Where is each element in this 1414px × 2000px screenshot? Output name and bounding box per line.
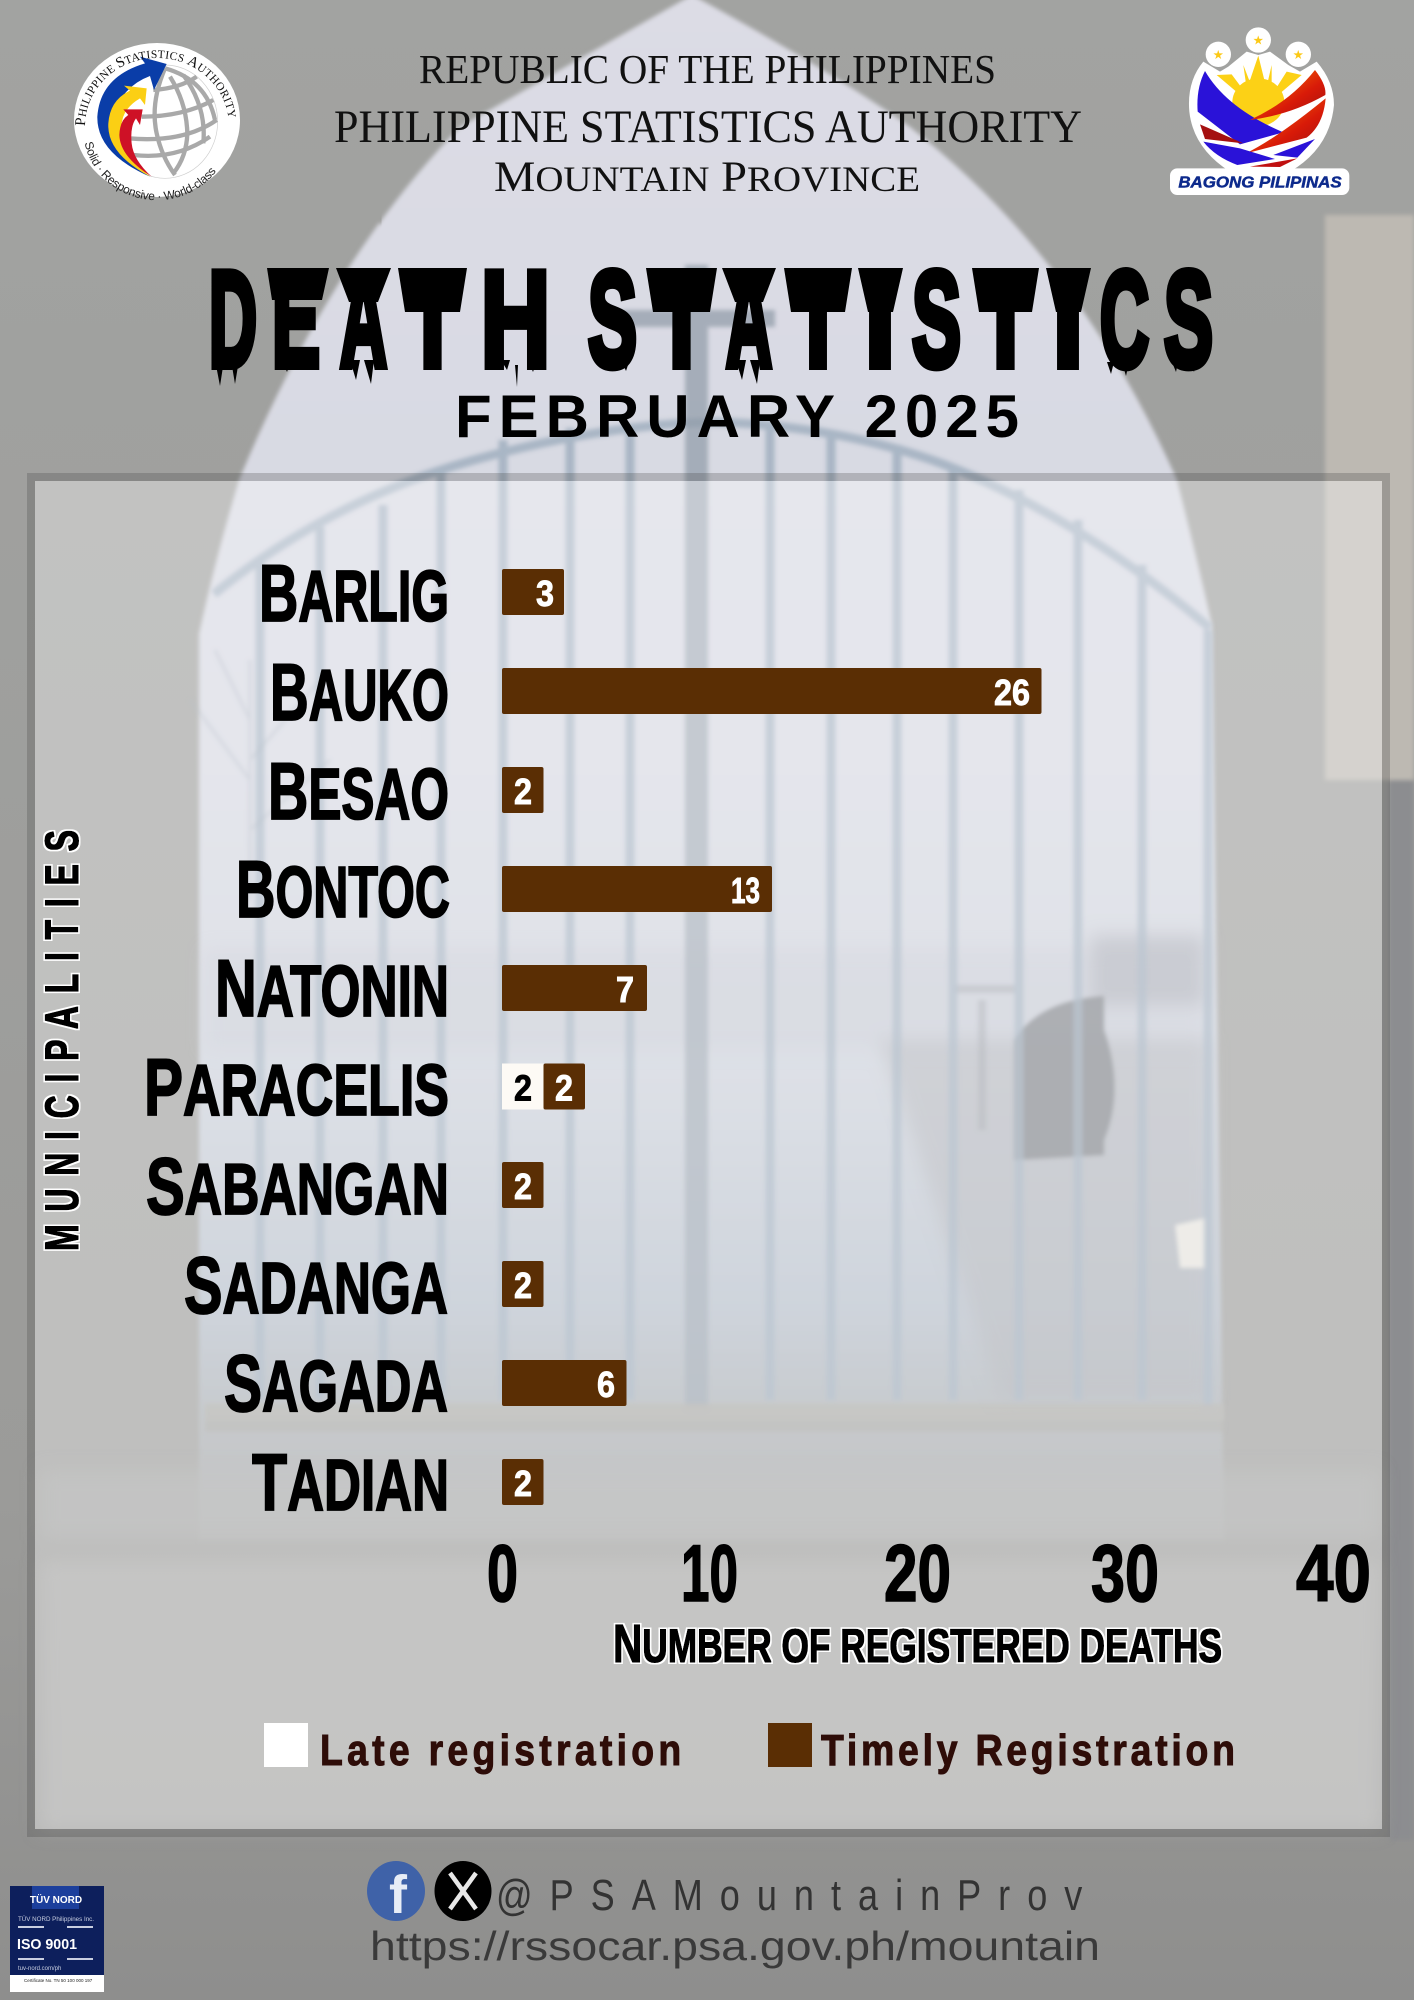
x-axis tick labels: 20 [884,1529,951,1619]
bar: Natonin 7: 7 [616,969,634,1010]
legend label: late: Late registration [320,1725,681,1775]
icon: X [434,1861,492,1921]
municipality labels: NATONIN [215,944,449,1034]
title: Death Statistics [209,243,1213,395]
municipality labels: SABANGAN [146,1142,449,1232]
municipality labels: BESAO [268,747,449,837]
bar: Barlig 3 [502,569,564,615]
title: Death Statistics: S [912,243,961,395]
logo: Bagong Pilipinas [1170,27,1349,195]
bar: Bauko 26 [502,668,1042,714]
title: Death Statistics: D [209,243,257,395]
title: Death Statistics: T [791,243,845,395]
bar: Sabangan 2 [502,1162,544,1208]
municipality labels: BAUKO [270,648,449,738]
bar: Sadanga 2: 2 [514,1265,532,1306]
legend swatch: timely [768,1723,812,1767]
badge: ISO 9001 certification: tuv-nord.com/ph [18,1966,61,1972]
icon: Facebook [367,1861,425,1925]
bar: Paracelis late 2 and timely 2: 2 [514,1068,532,1108]
municipality labels: SADANGA [184,1241,448,1331]
title: Death Statistics: C [1100,243,1149,395]
website URL: https://rssocar.psa.gov.ph/mountain [370,1923,1100,1969]
title: Death Statistics: S [1164,243,1213,395]
badge: ISO 9001 certification [10,1886,104,1992]
bar: Sabangan 2: 2 [514,1166,532,1207]
logo: Philippine Statistics Authority seal: PHILIPPINE STATISTICS AUTHORITY [75,50,236,126]
bar: Paracelis late 2 and timely 2: 2 [555,1068,573,1108]
bar: Sagada 6 [502,1360,626,1406]
tombstone [1014,996,1114,1160]
x-axis tick labels [487,1529,1371,1619]
agency heading [334,46,1082,201]
subtitle: February 2025: FEBRUARY 2025 [455,383,1019,450]
title: Death Statistics: E [272,243,320,395]
bar: Natonin 7 [502,965,647,1011]
agency heading: PHILIPPINE STATISTICS AUTHORITY [334,101,1082,153]
title: Death Statistics: T [654,243,709,395]
logo: Philippine Statistics Authority seal [74,43,240,200]
agency heading: MOUNTAIN PROVINCE [494,154,920,201]
y-axis title: Municipalities: MUNICIPALITIES [36,830,89,1251]
chart panel [31,477,1386,1833]
bar: Barlig 3: 3 [536,573,554,614]
municipality labels: TADIAN [252,1438,449,1528]
bar: Tadian 2: 2 [514,1463,532,1504]
legend swatch: late [264,1723,308,1767]
legend label: timely: Timely Registration [821,1725,1235,1775]
bar: Tadian 2 [502,1459,544,1505]
icon: Facebook: f [389,1865,408,1925]
social handle: @PSAMountainProv [496,1871,1082,1920]
title: Death Statistics: I [1053,243,1083,395]
bar: Bontoc 13 [502,866,772,912]
badge: ISO 9001 certification: ISO 9001 [17,1936,77,1953]
title: Death Statistics: H [481,243,550,395]
bar: Paracelis late 2 and timely 2 [502,1064,585,1110]
badge: ISO 9001 certification: TÜV NORD [30,1893,82,1906]
agency heading: REPUBLIC OF THE PHILIPPINES [419,46,996,92]
municipality labels: PARACELIS [144,1043,449,1133]
municipality labels: BARLIG [259,549,449,639]
logo: Bagong Pilipinas: ★ [1293,48,1304,62]
bar: Besao 2: 2 [514,771,532,812]
logo: Bagong Pilipinas: ★ [1213,48,1224,62]
x-axis tick labels: 0 [487,1529,518,1619]
x-axis tick labels: 40 [1296,1529,1371,1619]
legend [264,1723,1235,1775]
bar: Sadanga 2 [502,1261,544,1307]
bar: Besao 2 [502,767,544,813]
bar: Bontoc 13: 13 [731,870,760,911]
x-axis title: NUMBER OF REGISTERED DEATHS [613,1614,1222,1674]
title: Death Statistics: S [588,243,637,395]
municipality labels [144,549,450,1528]
logo: Bagong Pilipinas: ★ [1253,34,1264,48]
x-axis tick labels: 10 [681,1529,738,1619]
title: Death Statistics: T [978,243,1033,395]
badge: ISO 9001 certification: Certificate No. TN 50 100 000 197 [24,1978,93,1983]
x-axis tick labels: 30 [1091,1529,1159,1619]
bar: Sagada 6: 6 [597,1364,615,1405]
badge: ISO 9001 certification: TÜV NORD Philippines Inc. [18,1915,94,1923]
municipality labels: BONTOC [236,845,450,935]
bar chart: registered deaths by municipality [502,569,1042,1505]
title: Death Statistics: A [340,243,387,395]
title: Death Statistics: T [405,243,460,395]
logo: Bagong Pilipinas: BAGONG PILIPINAS [1178,175,1343,192]
municipality labels: SAGADA [224,1339,448,1429]
title: Death Statistics: I [865,243,895,395]
bar: Bauko 26: 26 [994,672,1030,713]
drips and flares [215,268,1196,387]
logo: Philippine Statistics Authority seal: Solid · Responsive · World-class [85,142,216,200]
title: Death Statistics: A [726,243,772,395]
